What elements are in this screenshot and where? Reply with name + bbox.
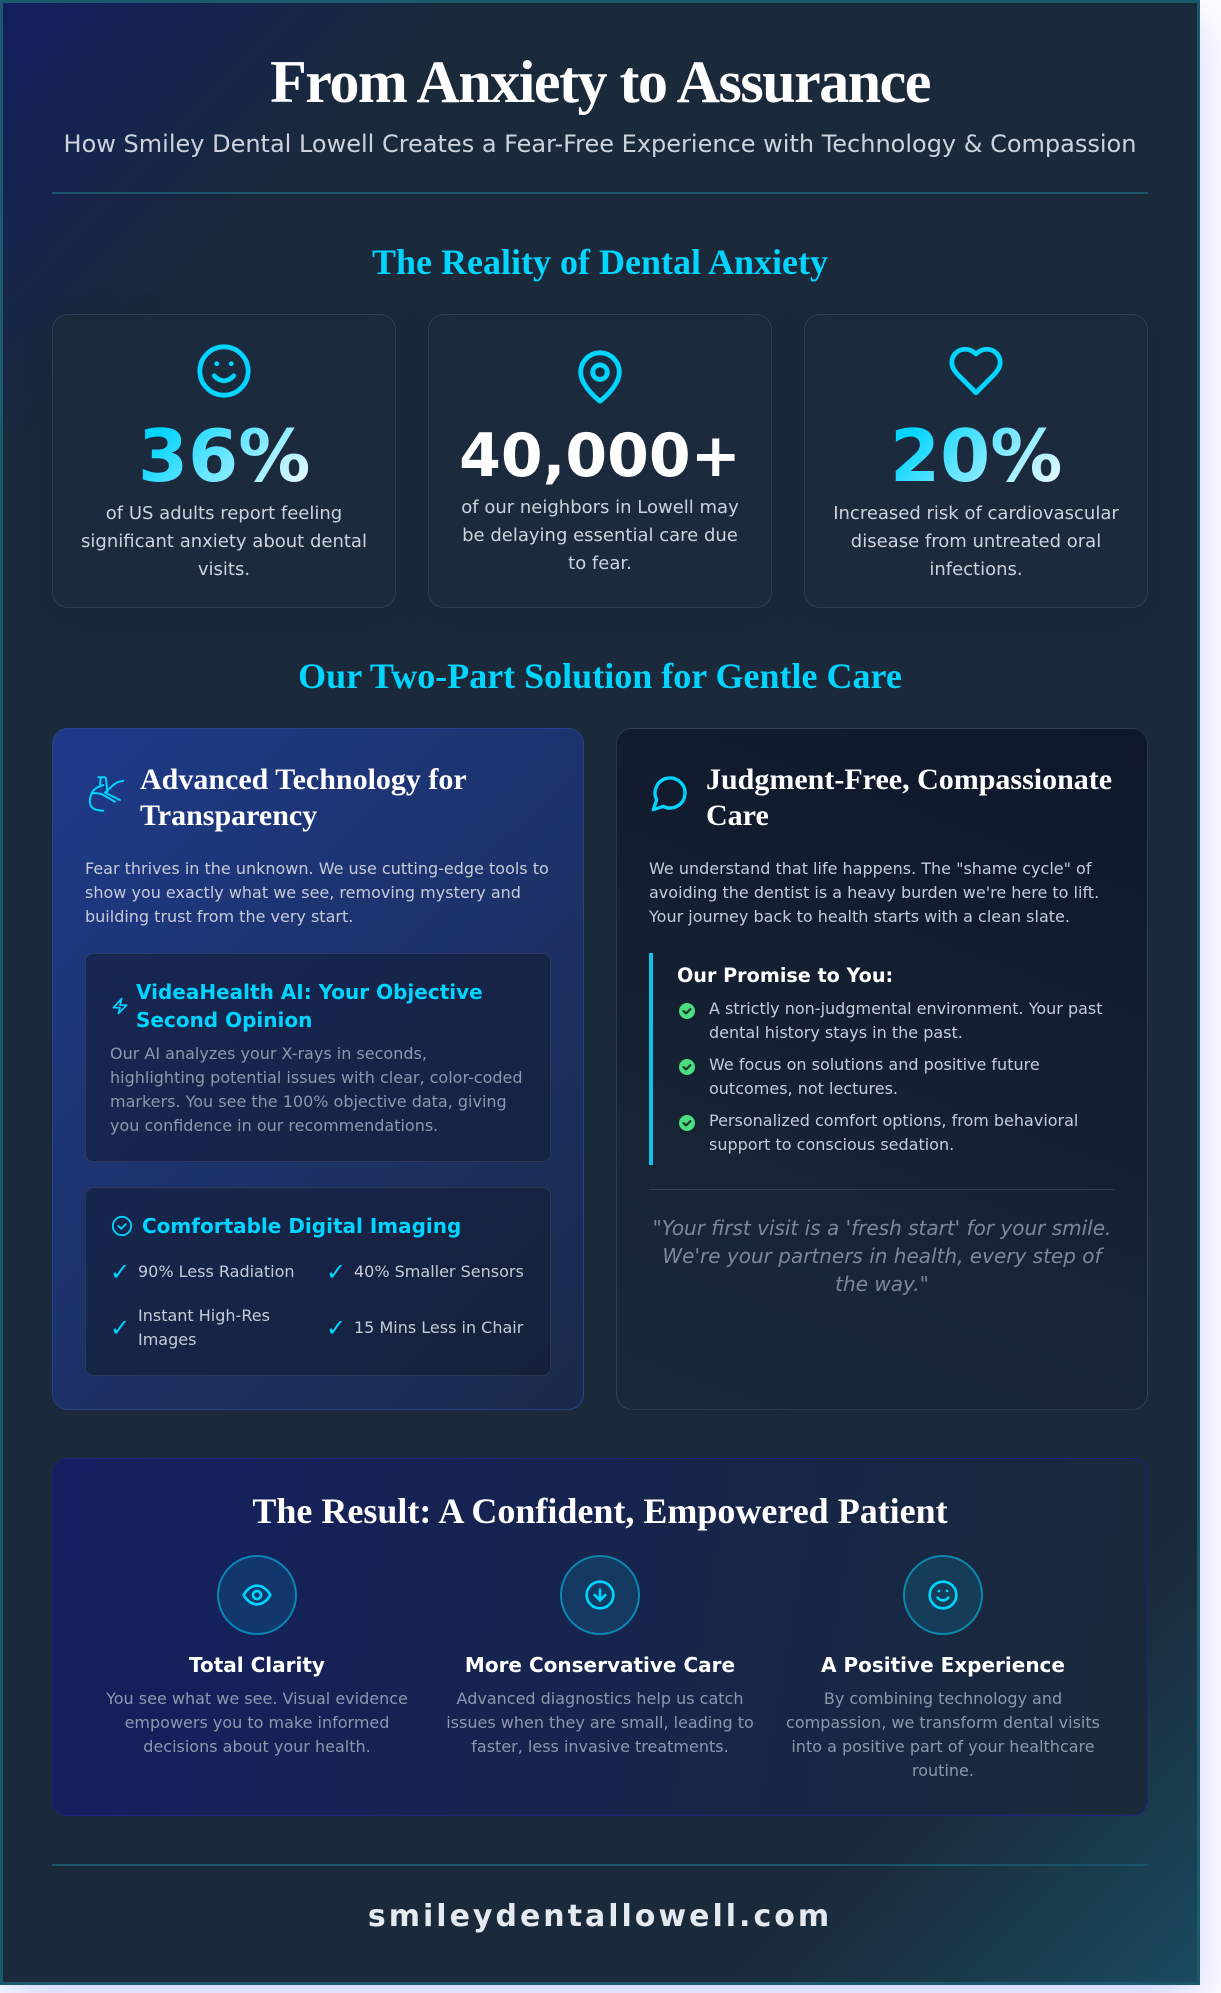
- stat description: disease from untreated oral: [851, 531, 1101, 552]
- feature: images: [110, 1306, 270, 1349]
- heading: compassion: Care: [706, 799, 769, 832]
- result text: clarity: empowers you to make informed: [125, 1713, 389, 1732]
- subtitle: How Smiley Dental Lowell Creates a Fear-Free Experience with Technology & Compassion: [64, 130, 1136, 158]
- promise item 1: dental history stays in the past.: [709, 1023, 963, 1042]
- promise item 1: [679, 999, 1103, 1042]
- heading: compassion: Judgment-Free, Compassionate: [706, 763, 1112, 796]
- promise item 3: [679, 1111, 1078, 1154]
- promise item 2: We focus on solutions and positive future: [709, 1055, 1040, 1074]
- feature: images: ✓: [110, 1314, 130, 1342]
- stat description: of US adults report feeling: [106, 503, 342, 524]
- stat: 40,000+: 40,000+: [459, 421, 741, 491]
- stat card: 36%: [52, 314, 396, 608]
- feature: radiation: 90% Less Radiation: [138, 1262, 295, 1281]
- feature: images: Instant High-Res: [138, 1306, 270, 1325]
- result text: conservative: issues when they are small, leading to: [446, 1713, 754, 1732]
- result text: conservative: Advanced diagnostics help us catch: [457, 1689, 743, 1708]
- promise item 1: A strictly non-judgmental environment. Your past: [709, 999, 1103, 1018]
- panel: compassion: [616, 728, 1148, 1410]
- panel: result: [52, 1458, 1148, 1816]
- text: technology intro: [85, 859, 549, 926]
- icon: green check: [679, 1115, 695, 1131]
- icon: heart: [949, 346, 1003, 396]
- result title: conservative: More Conservative Care: [465, 1653, 735, 1677]
- feature: radiation: [110, 1258, 295, 1286]
- feature: chair: 15 Mins Less in Chair: [354, 1318, 523, 1337]
- quote: "Your first visit is a 'fresh start' for your smile.: [653, 1216, 1111, 1240]
- text: technology intro: Fear thrives in the unknown. We use cutting-edge tools to: [85, 859, 549, 878]
- footer url: smileydentallowell.com: [368, 1899, 832, 1934]
- card: digital imaging: [85, 1187, 551, 1376]
- heading: technology: [140, 763, 467, 832]
- icon: map pin: [578, 350, 622, 404]
- text: technology intro: building trust from the very start.: [85, 907, 353, 926]
- quote: the way.": [835, 1272, 929, 1296]
- icon: green check: [679, 1003, 695, 1019]
- text: VideaHealth AI: [110, 1044, 523, 1135]
- stat card: 40,000+: [428, 314, 772, 608]
- icon: check circle: [112, 1216, 132, 1236]
- icon: stethoscope: [88, 776, 124, 812]
- title: From Anxiety to Assurance: [270, 49, 930, 115]
- result title: clarity: Total Clarity: [189, 1653, 325, 1677]
- promise item 3: Personalized comfort options, from behavioral: [709, 1111, 1078, 1130]
- text: VideaHealth AI: you confidence in our recommendations.: [110, 1116, 438, 1135]
- text: compassion intro: avoiding the dentist is a heavy burden we're here to lift.: [649, 883, 1099, 902]
- text: VideaHealth AI: highlighting potential issues with clear, color-coded: [110, 1068, 523, 1087]
- stat description: [833, 503, 1119, 580]
- icon: smile: [197, 344, 251, 398]
- card: VideaHealth AI: [85, 953, 551, 1162]
- text: technology intro: show you exactly what we see, removing mystery and: [85, 883, 521, 902]
- stat description: infections.: [929, 559, 1023, 580]
- feature: sensors: [326, 1258, 524, 1286]
- heading: VideaHealth AI: Second Opinion: [136, 1008, 312, 1032]
- stat description: [81, 503, 367, 580]
- stat description: Increased risk of cardiovascular: [833, 503, 1119, 524]
- quote: [653, 1216, 1111, 1296]
- text: compassion intro: Your journey back to health starts with a clean slate.: [649, 907, 1070, 926]
- text: VideaHealth AI: Our AI analyzes your X-rays in seconds,: [110, 1044, 427, 1063]
- heading: compassion: [706, 763, 1112, 832]
- result text: positive: into a positive part of your healthcare: [791, 1737, 1095, 1756]
- text: compassion intro: [649, 859, 1099, 926]
- heading: technology: Advanced Technology for: [140, 763, 467, 796]
- result text: clarity: You see what we see. Visual evidence: [106, 1689, 408, 1708]
- icon: green check: [679, 1059, 695, 1075]
- result text: conservative: [446, 1689, 754, 1756]
- feature: chair: [326, 1314, 524, 1342]
- heading: VideaHealth AI: [136, 980, 483, 1032]
- feature: images: Images: [138, 1330, 196, 1349]
- heading: result: The Result: A Confident, Empowered Patient: [252, 1491, 948, 1531]
- heading: promise: Our Promise to You:: [677, 964, 893, 987]
- promise item 2: [679, 1055, 1040, 1098]
- feature: sensors: 40% Smaller Sensors: [354, 1262, 524, 1281]
- panel: technology: [52, 728, 584, 1410]
- icon: eye: [217, 1555, 297, 1635]
- result text: clarity: [106, 1689, 408, 1756]
- text: VideaHealth AI: markers. You see the 100% objective data, giving: [110, 1092, 507, 1111]
- heading: reality: The Reality of Dental Anxiety: [372, 242, 828, 282]
- heading: VideaHealth AI: VideaHealth AI: Your Objective: [136, 980, 483, 1004]
- stat description: be delaying essential care due: [462, 525, 738, 546]
- result text: positive: [786, 1689, 1100, 1780]
- stat: 20%: 20%: [890, 414, 1062, 498]
- feature: radiation: ✓: [110, 1258, 130, 1286]
- stat description: significant anxiety about dental: [81, 531, 367, 552]
- text: compassion intro: We understand that life happens. The "shame cycle" of: [649, 859, 1091, 878]
- quote divider: [649, 1189, 1115, 1190]
- icon: message bubble: [652, 776, 687, 812]
- stat description: [461, 497, 739, 574]
- stat: 36%: 36%: [138, 414, 310, 498]
- icon: smile: [903, 1555, 983, 1635]
- promise item 3: support to conscious sedation.: [709, 1135, 954, 1154]
- result text: clarity: decisions about your health.: [143, 1737, 371, 1756]
- icon: zap: [112, 998, 128, 1014]
- icon: arrow down circle: [560, 1555, 640, 1635]
- heading: digital imaging: Comfortable Digital Imaging: [142, 1214, 461, 1238]
- promise block: [649, 953, 1115, 1165]
- header divider: [52, 192, 1148, 194]
- result text: positive: By combining technology and: [824, 1689, 1062, 1708]
- result text: positive: routine.: [912, 1761, 974, 1780]
- footer divider: [52, 1864, 1148, 1866]
- promise item 2: outcomes, not lectures.: [709, 1079, 898, 1098]
- result title: positive: A Positive Experience: [821, 1653, 1065, 1677]
- feature: chair: ✓: [326, 1314, 346, 1342]
- quote: We're your partners in health, every step of: [662, 1244, 1102, 1268]
- stat card: 20%: [804, 314, 1148, 608]
- heading: technology: Transparency: [140, 799, 317, 832]
- result text: positive: compassion, we transform dental visits: [786, 1713, 1100, 1732]
- result text: conservative: faster, less invasive treatments.: [471, 1737, 729, 1756]
- stat description: visits.: [198, 559, 250, 580]
- feature: sensors: ✓: [326, 1258, 346, 1286]
- stat description: to fear.: [568, 553, 632, 574]
- stat description: of our neighbors in Lowell may: [461, 497, 739, 518]
- heading: solution: Our Two-Part Solution for Gentle Care: [298, 656, 902, 696]
